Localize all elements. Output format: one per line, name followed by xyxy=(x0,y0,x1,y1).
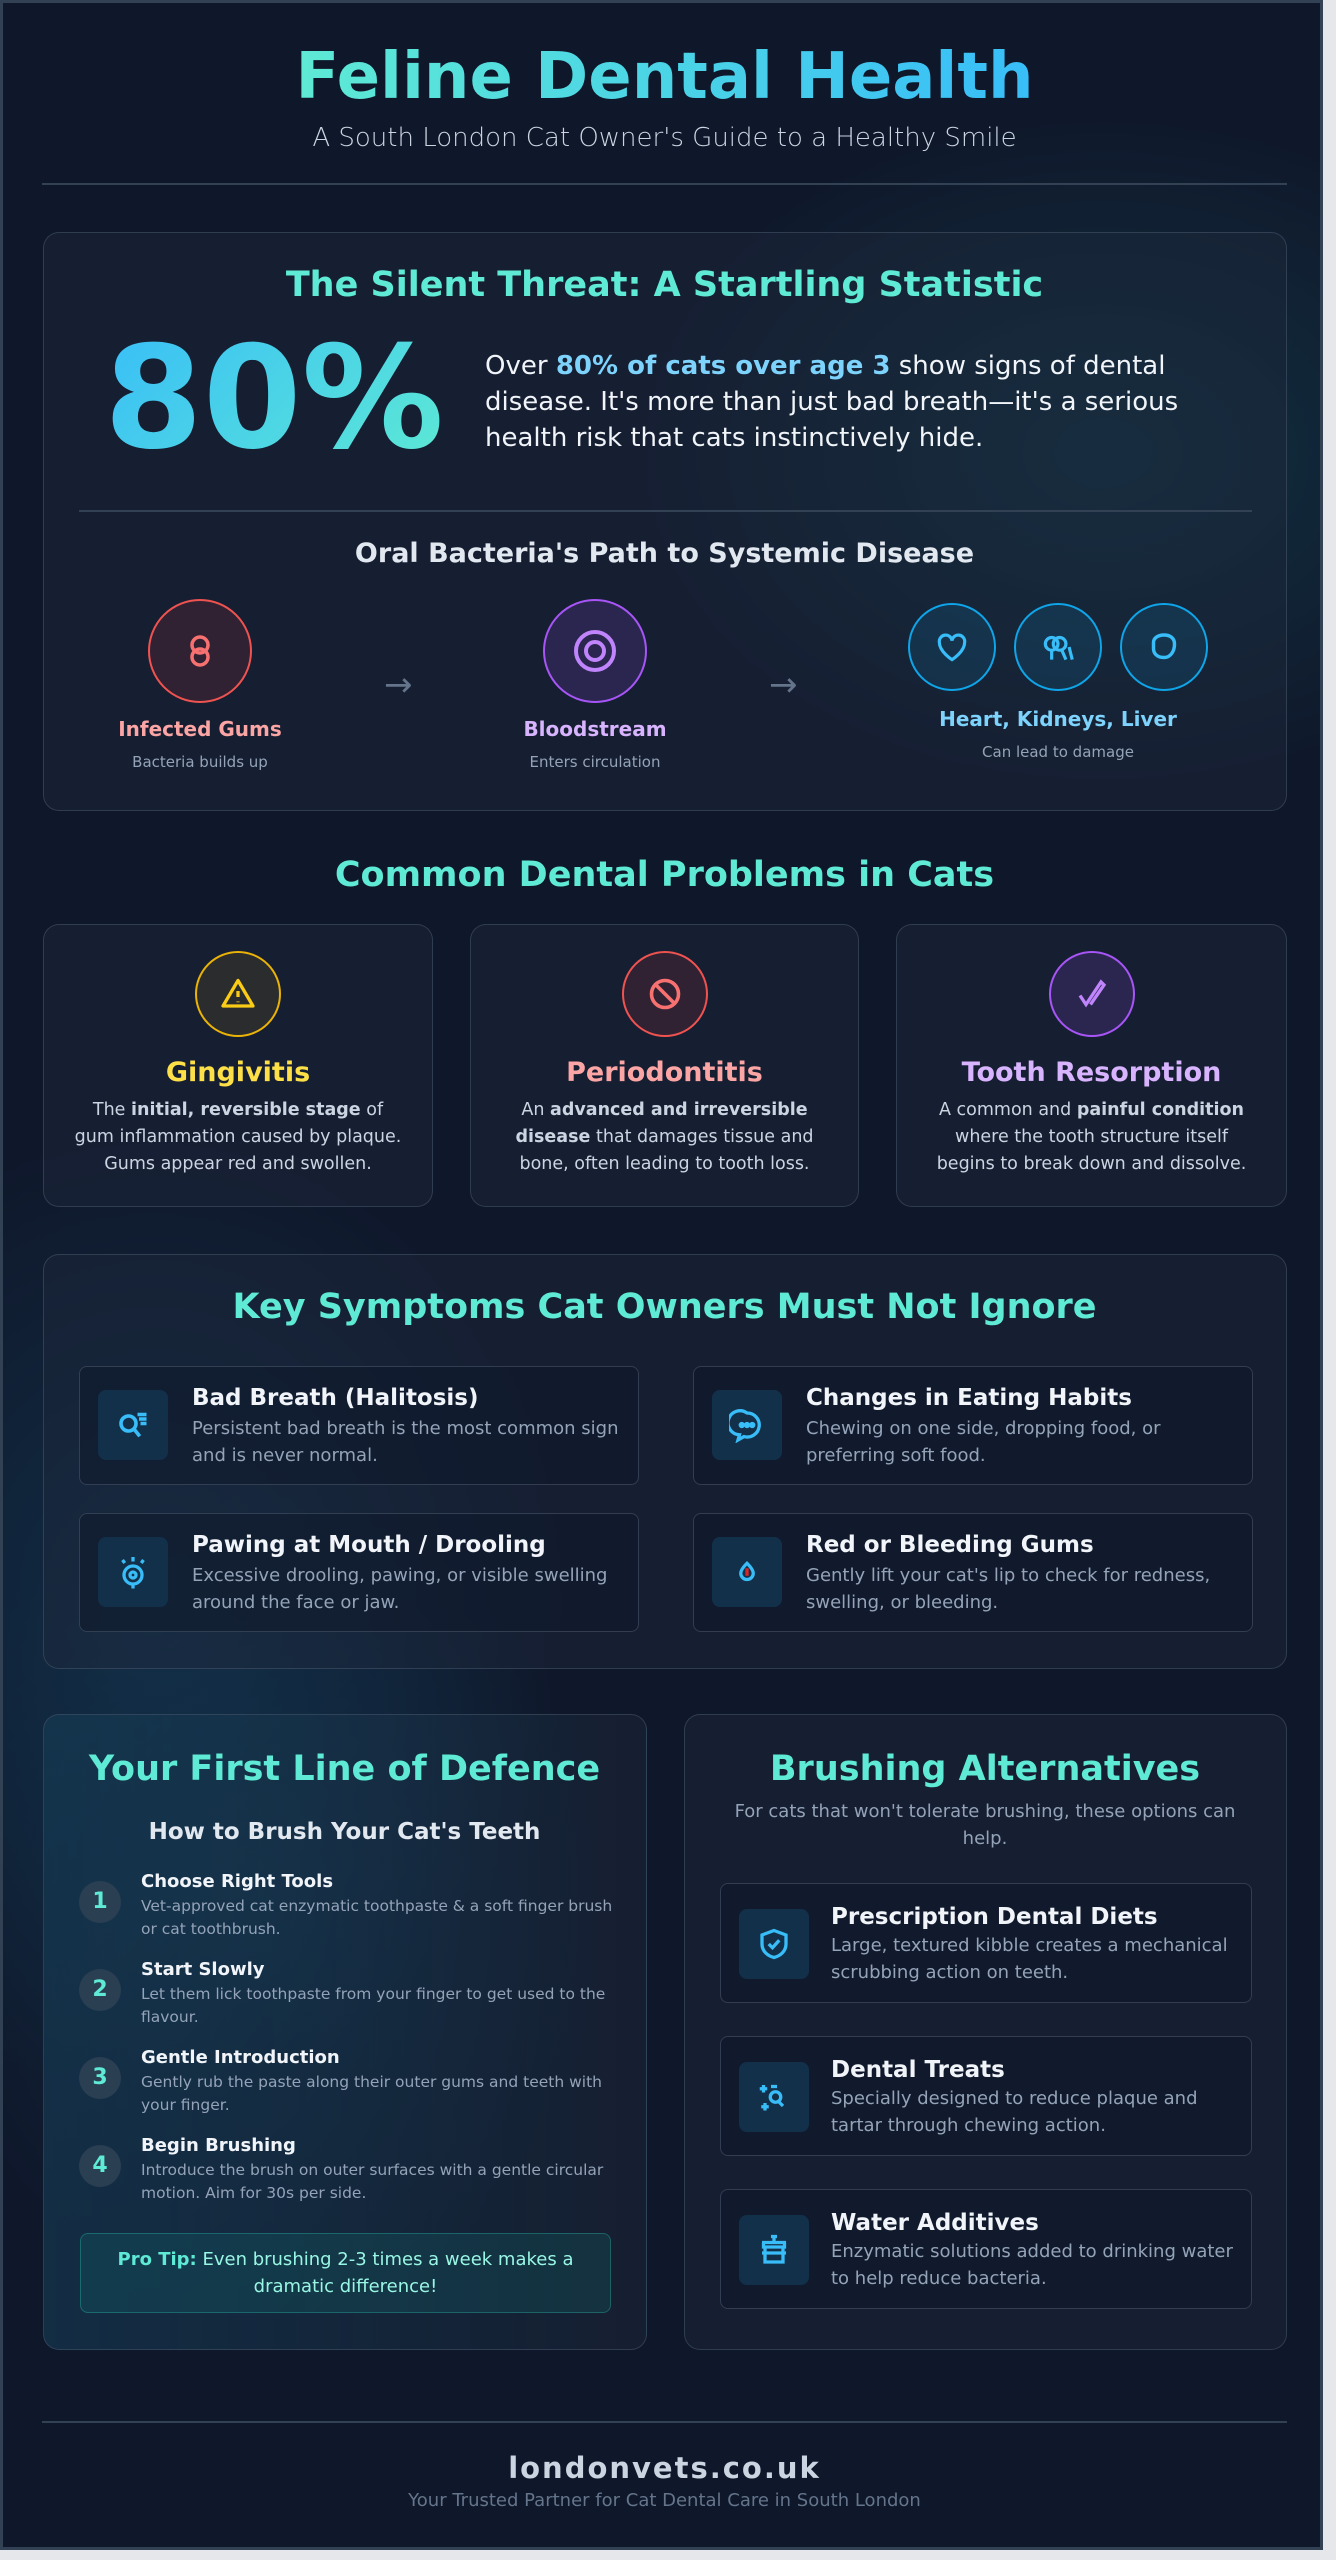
step 4 xyxy=(79,2135,604,2202)
step: infected gums: Infected Gums xyxy=(118,717,282,741)
card: gingivitis: Gingivitis xyxy=(166,1057,310,1088)
symptom: bleeding gums: Gently lift your cat's lip to check for redness, swelling, or bleeding. xyxy=(806,1565,1210,1613)
step 3: Gentle Introduction xyxy=(141,2047,340,2068)
step 4: Introduce the brush on outer surfaces with a gentle circular motion. Aim for 30s per side. xyxy=(141,2161,603,2202)
icon: shield xyxy=(739,1909,809,1979)
panel: key symptoms xyxy=(43,1254,1287,1669)
footer: website: londonvets.co.uk xyxy=(508,2451,821,2485)
title: Feline Dental Health xyxy=(296,40,1034,114)
step 3: 3 xyxy=(92,2065,108,2090)
symptom: bad breath: Persistent bad breath is the most common sign and is never normal. xyxy=(192,1418,618,1466)
alt: dental treats: Dental Treats xyxy=(831,2057,1005,2083)
step: bloodstream: Enters circulation xyxy=(530,753,660,771)
symptom: pawing: Pawing at Mouth / Drooling xyxy=(192,1532,546,1558)
icon: drop xyxy=(712,1537,782,1607)
icon: gums xyxy=(148,599,252,703)
icon: prohibited xyxy=(622,951,708,1037)
symptom: eating habits: Chewing on one side, dropping food, or preferring soft food. xyxy=(806,1418,1161,1466)
heading: defence: Your First Line of Defence xyxy=(89,1749,600,1789)
icons: organs xyxy=(908,603,1208,691)
card: tooth resorption: Tooth Resorption xyxy=(962,1057,1221,1088)
alt: dental treats xyxy=(720,2036,1252,2156)
heading: symptoms: Key Symptoms Cat Owners Must Not Ignore xyxy=(232,1287,1097,1327)
callout: pro tip: Pro Tip: Even brushing 2-3 times a week makes a dramatic difference! xyxy=(118,2249,573,2297)
icon: check xyxy=(1048,951,1134,1037)
step: bloodstream xyxy=(523,599,667,771)
stat text: Over 80% of cats over age 3 show signs of dental disease. It's more than just bad breath—it's a serious health risk that cats instinctively hide. xyxy=(485,351,1178,453)
step 3 xyxy=(79,2047,602,2114)
step 1: Vet-approved cat enzymatic toothpaste & a soft finger brush or cat toothbrush. xyxy=(141,1897,612,1938)
icon: alarm xyxy=(98,1537,168,1607)
step 2: Let them lick toothpaste from your finger to get used to the flavour. xyxy=(141,1985,605,2026)
step: infected gums: Bacteria builds up xyxy=(132,753,268,771)
step 3: Gently rub the paste along their outer gums and teeth with your finger. xyxy=(141,2073,602,2114)
step 1: 1 xyxy=(92,1889,108,1914)
icon: chat xyxy=(712,1390,782,1460)
symptom: bad breath xyxy=(79,1366,639,1485)
panel: brushing alternatives xyxy=(684,1714,1287,2350)
icon: warning xyxy=(195,951,281,1037)
symptom: pawing xyxy=(79,1513,639,1632)
symptom: eating habits xyxy=(693,1366,1253,1485)
card: periodontitis xyxy=(470,924,859,1207)
big stat 80%: 80% xyxy=(104,316,444,481)
step: bloodstream: Bloodstream xyxy=(523,717,667,741)
heading: alternatives: Brushing Alternatives xyxy=(770,1749,1200,1789)
icon: bowl xyxy=(739,2215,809,2285)
symptom: bleeding gums xyxy=(693,1513,1253,1632)
alt: prescription diets: Large, textured kibble creates a mechanical scrubbing action on teeth. xyxy=(831,1935,1228,1983)
alt: water additives: Water Additives xyxy=(831,2210,1039,2236)
card: gingivitis xyxy=(43,924,433,1207)
card: periodontitis: Periodontitis xyxy=(566,1057,763,1088)
subtitle: A South London Cat Owner's Guide to a Healthy Smile xyxy=(312,123,1017,153)
step 2: Start Slowly xyxy=(141,1959,264,1980)
alt: water additives: Enzymatic solutions added to drinking water to help reduce bacteria. xyxy=(831,2241,1233,2289)
icon: bloodstream xyxy=(543,599,647,703)
card: tooth resorption xyxy=(896,924,1287,1207)
heading: common problems: Common Dental Problems in Cats xyxy=(335,855,994,895)
step 4: Begin Brushing xyxy=(141,2135,296,2156)
step 2 xyxy=(79,1959,605,2026)
symptom: pawing: Excessive drooling, pawing, or visible swelling around the face or jaw. xyxy=(192,1565,607,1613)
icon: search xyxy=(98,1390,168,1460)
alt: water additives xyxy=(720,2189,1252,2309)
icon: sparkle xyxy=(739,2062,809,2132)
arrow: → xyxy=(384,665,412,705)
alt: dental treats: Specially designed to reduce plaque and tartar through chewing action. xyxy=(831,2088,1198,2136)
card: tooth resorption: A common and painful condition where the tooth structure itself begins to break down and dissolve. xyxy=(937,1100,1246,1174)
step 1 xyxy=(79,1871,612,1938)
card: gingivitis: The initial, reversible stage of gum inflammation caused by plaque. Gums appear red and swollen. xyxy=(75,1100,401,1174)
panel: first line of defence xyxy=(43,1714,647,2350)
alt: prescription diets: Prescription Dental Diets xyxy=(831,1904,1158,1930)
step: infected gums xyxy=(118,599,282,771)
arrow: → xyxy=(769,665,798,705)
card: periodontitis: An advanced and irreversible disease that damages tissue and bone, often leading to tooth loss. xyxy=(515,1100,814,1174)
alt: prescription diets xyxy=(720,1883,1252,2003)
step: organs: Can lead to damage xyxy=(982,743,1134,761)
symptom: eating habits: Changes in Eating Habits xyxy=(806,1385,1132,1411)
panel: silent threat xyxy=(43,232,1287,811)
step 2: 2 xyxy=(92,1977,108,2002)
step 1: Choose Right Tools xyxy=(141,1871,333,1892)
callout: pro tip xyxy=(80,2233,611,2313)
intro text: For cats that won't tolerate brushing, these options can help. xyxy=(735,1801,1235,1849)
symptom: bleeding gums: Red or Bleeding Gums xyxy=(806,1532,1094,1558)
heading: bacteria path: Oral Bacteria's Path to Systemic Disease xyxy=(355,538,974,569)
heading: silent threat: The Silent Threat: A Startling Statistic xyxy=(286,265,1043,305)
step 4: 4 xyxy=(92,2153,108,2178)
step: organs xyxy=(908,603,1208,761)
symptom: bad breath: Bad Breath (Halitosis) xyxy=(192,1385,479,1411)
subheading: how to brush: How to Brush Your Cat's Teeth xyxy=(149,1819,540,1845)
step: organs: Heart, Kidneys, Liver xyxy=(939,707,1177,731)
footer: tagline: Your Trusted Partner for Cat Dental Care in South London xyxy=(408,2490,921,2511)
